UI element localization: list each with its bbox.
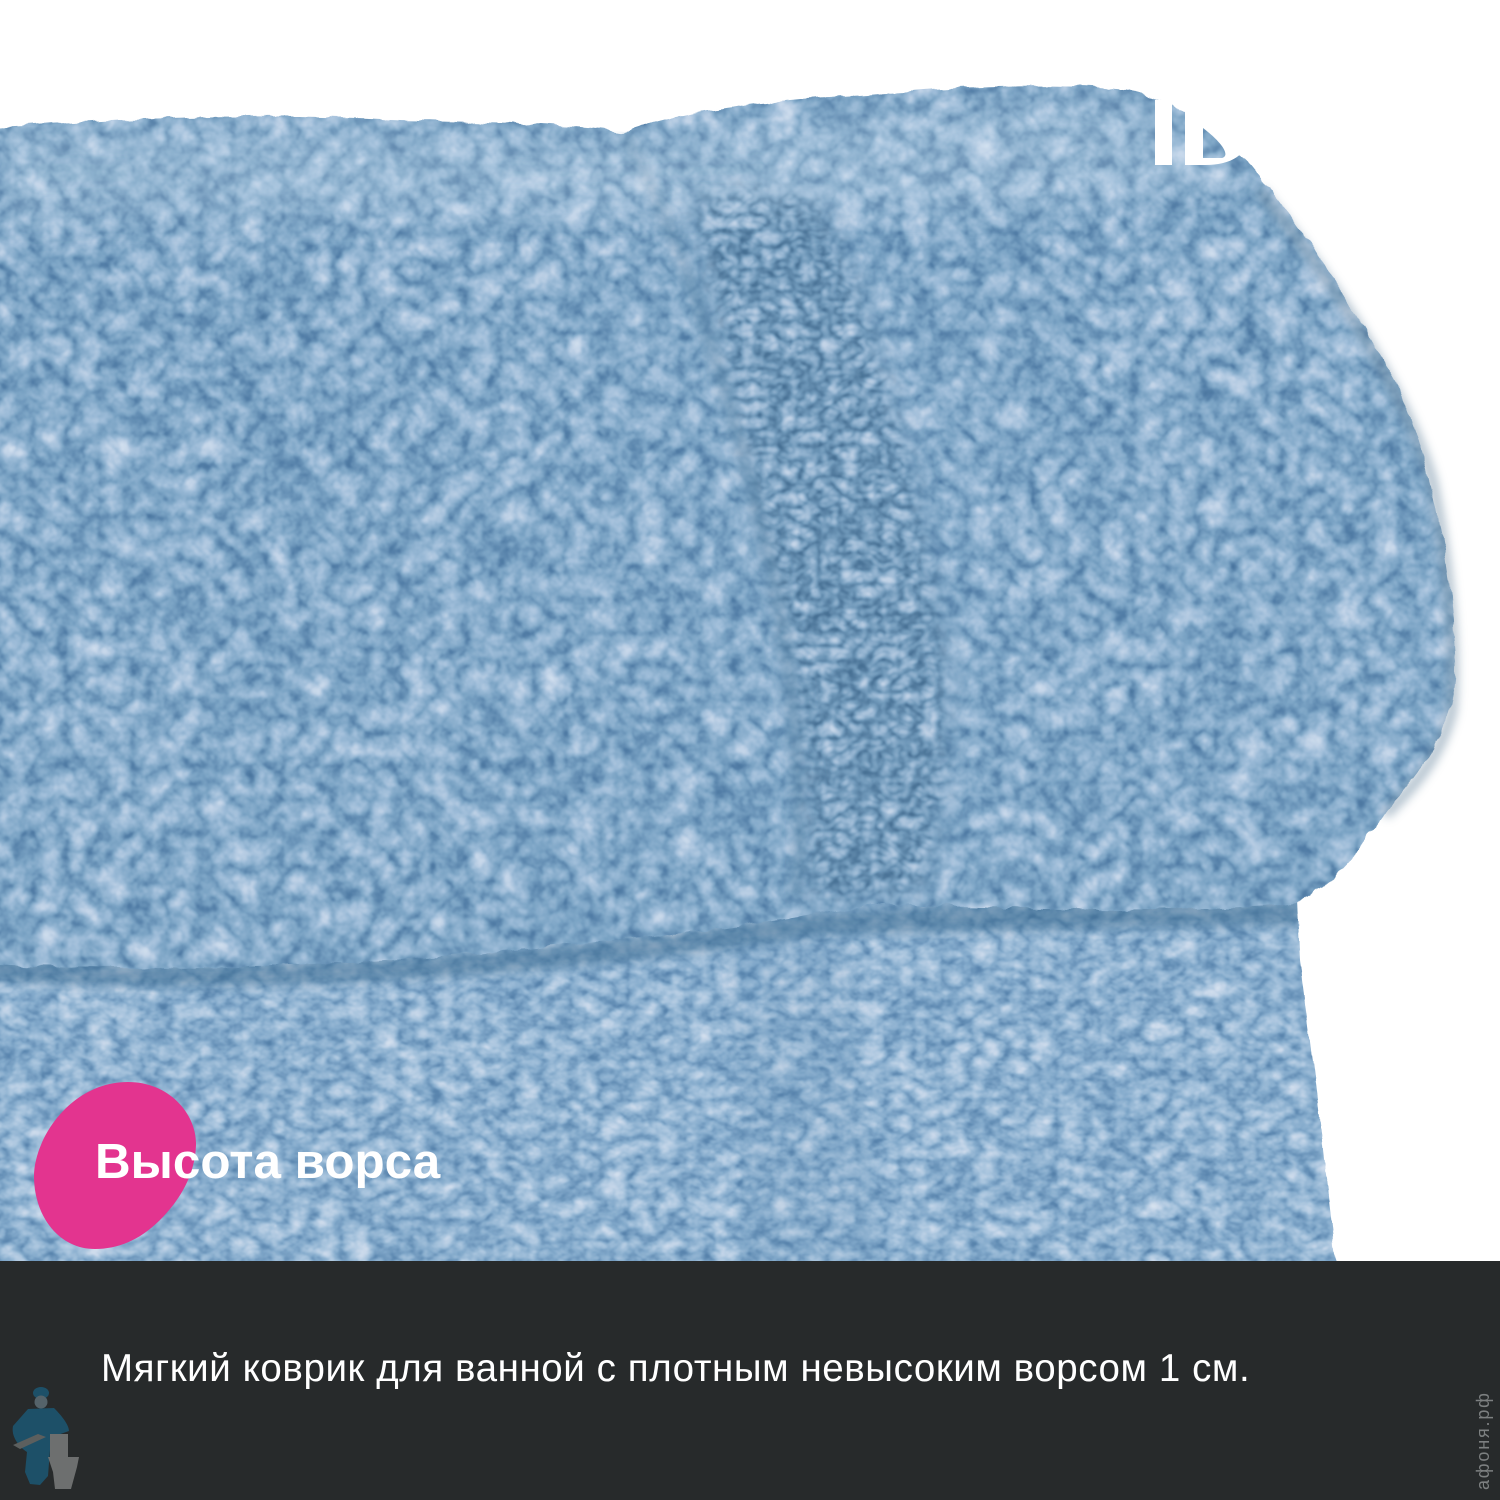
pebbled stripe on roll — [690, 186, 949, 900]
watermark: афоня.рф — [1473, 1391, 1493, 1490]
stripe shadow edge — [625, 135, 799, 895]
shadow below the roll — [0, 900, 1300, 986]
pink blob behind heading — [34, 1082, 196, 1249]
photo: rolled blue bath mat — [0, 84, 1464, 1261]
dark caption panel — [0, 1261, 1500, 1500]
upper roll of the mat — [0, 86, 1456, 968]
heading: Высота ворса — [95, 1134, 440, 1189]
lower layer of the mat — [0, 902, 1337, 1261]
caption text: Мягкий коврик для ванной с плотным невысоким ворсом 1 см. — [101, 1347, 1250, 1390]
grey binding on the edge — [1260, 190, 1453, 815]
white partial lettering at top — [1155, 100, 1248, 165]
highlight at top of roll — [0, 92, 1260, 220]
lower pebbled band — [730, 936, 866, 1257]
icon: plumber with toilet — [12, 1387, 79, 1489]
